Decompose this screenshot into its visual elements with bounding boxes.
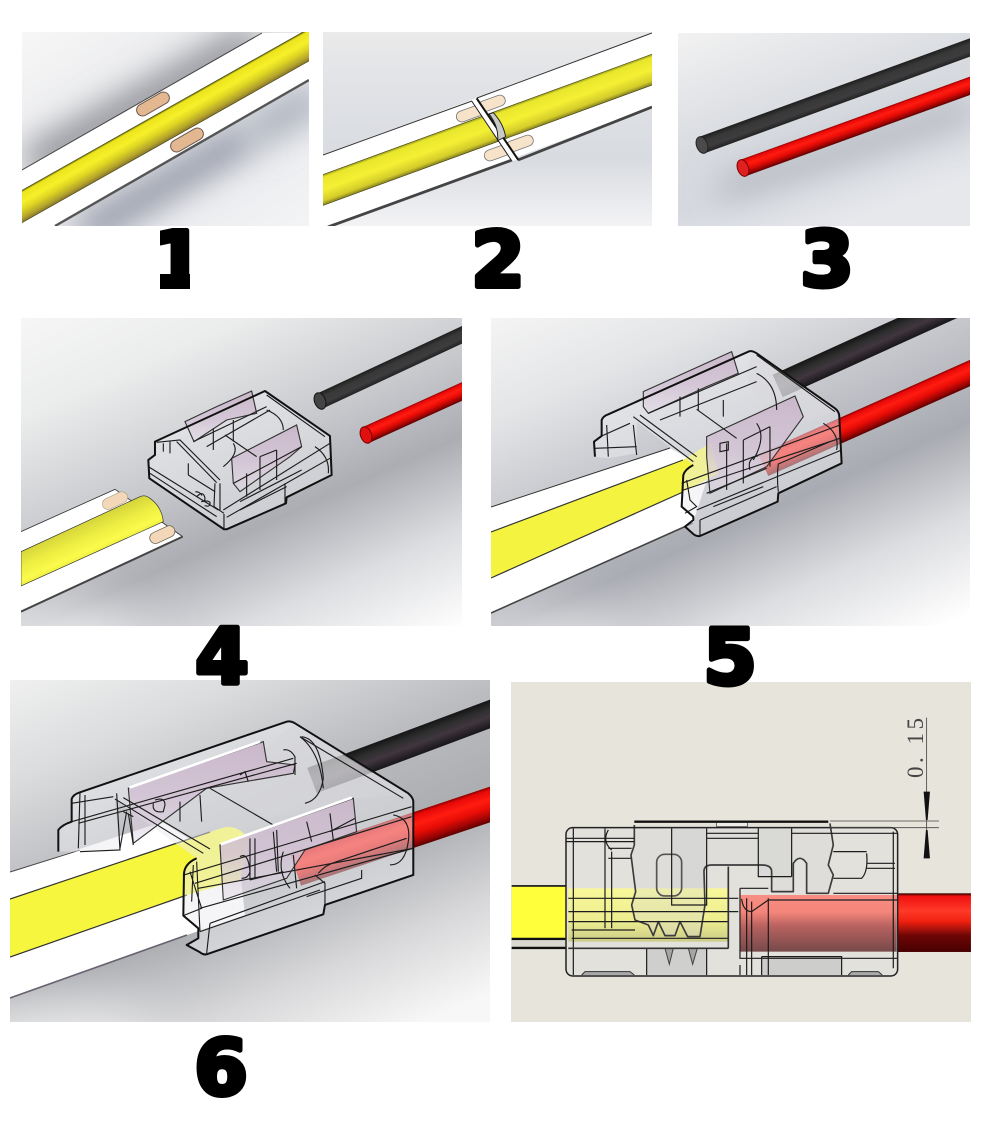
back clip — [185, 391, 257, 442]
black wire — [772, 318, 957, 397]
number 3: 3 — [800, 216, 854, 305]
black wire — [694, 34, 987, 155]
white strip — [10, 822, 245, 998]
dimension lines — [830, 718, 939, 858]
number 5: 5 — [703, 614, 757, 703]
yellow strip side view — [512, 886, 567, 948]
panel 7: side view with clearance dimension — [511, 682, 971, 1022]
panel 5: parts inserted — [491, 318, 970, 626]
panel 3: wires — [678, 33, 990, 226]
cut gap — [472, 98, 518, 161]
pads beside the cut — [455, 94, 535, 162]
back clip — [643, 352, 738, 413]
black wire — [314, 326, 462, 410]
connector — [58, 721, 413, 954]
yellow COB strip — [22, 32, 309, 223]
copper pad bottom — [170, 128, 204, 152]
clip outline — [631, 823, 833, 937]
number 6: 6 — [194, 1024, 248, 1114]
yellow COB strip — [10, 827, 250, 957]
red wire — [736, 76, 970, 177]
white strip — [323, 33, 652, 227]
front clip — [707, 396, 803, 493]
red wire side view — [898, 893, 971, 952]
panel 1: LED strip — [22, 32, 309, 226]
white strip — [491, 448, 710, 613]
copper pad top — [136, 92, 170, 116]
red wire — [360, 382, 462, 444]
white strip — [22, 33, 309, 227]
feet — [582, 972, 882, 975]
panel 6: connector closed — [10, 680, 490, 1022]
panel 4: parts before assembly — [21, 318, 462, 626]
internal lines — [566, 828, 898, 975]
back clip — [128, 742, 295, 843]
number 4: 4 — [195, 613, 249, 702]
red wire — [290, 786, 490, 886]
black wire — [307, 698, 504, 793]
connector — [148, 391, 332, 529]
yellow COB strip — [491, 442, 718, 578]
front clip — [220, 798, 357, 900]
number 1: 1 — [151, 216, 205, 306]
panel 2: strip cut — [323, 32, 652, 226]
connector body — [566, 822, 898, 976]
yellow COB strip — [323, 54, 652, 206]
dimension value: 0. 15 — [903, 714, 928, 778]
front clip — [232, 425, 302, 492]
strip end — [21, 489, 183, 612]
number 2: 2 — [471, 216, 525, 306]
clip top rails — [129, 742, 352, 844]
red wire — [758, 360, 970, 476]
connector — [594, 351, 842, 536]
